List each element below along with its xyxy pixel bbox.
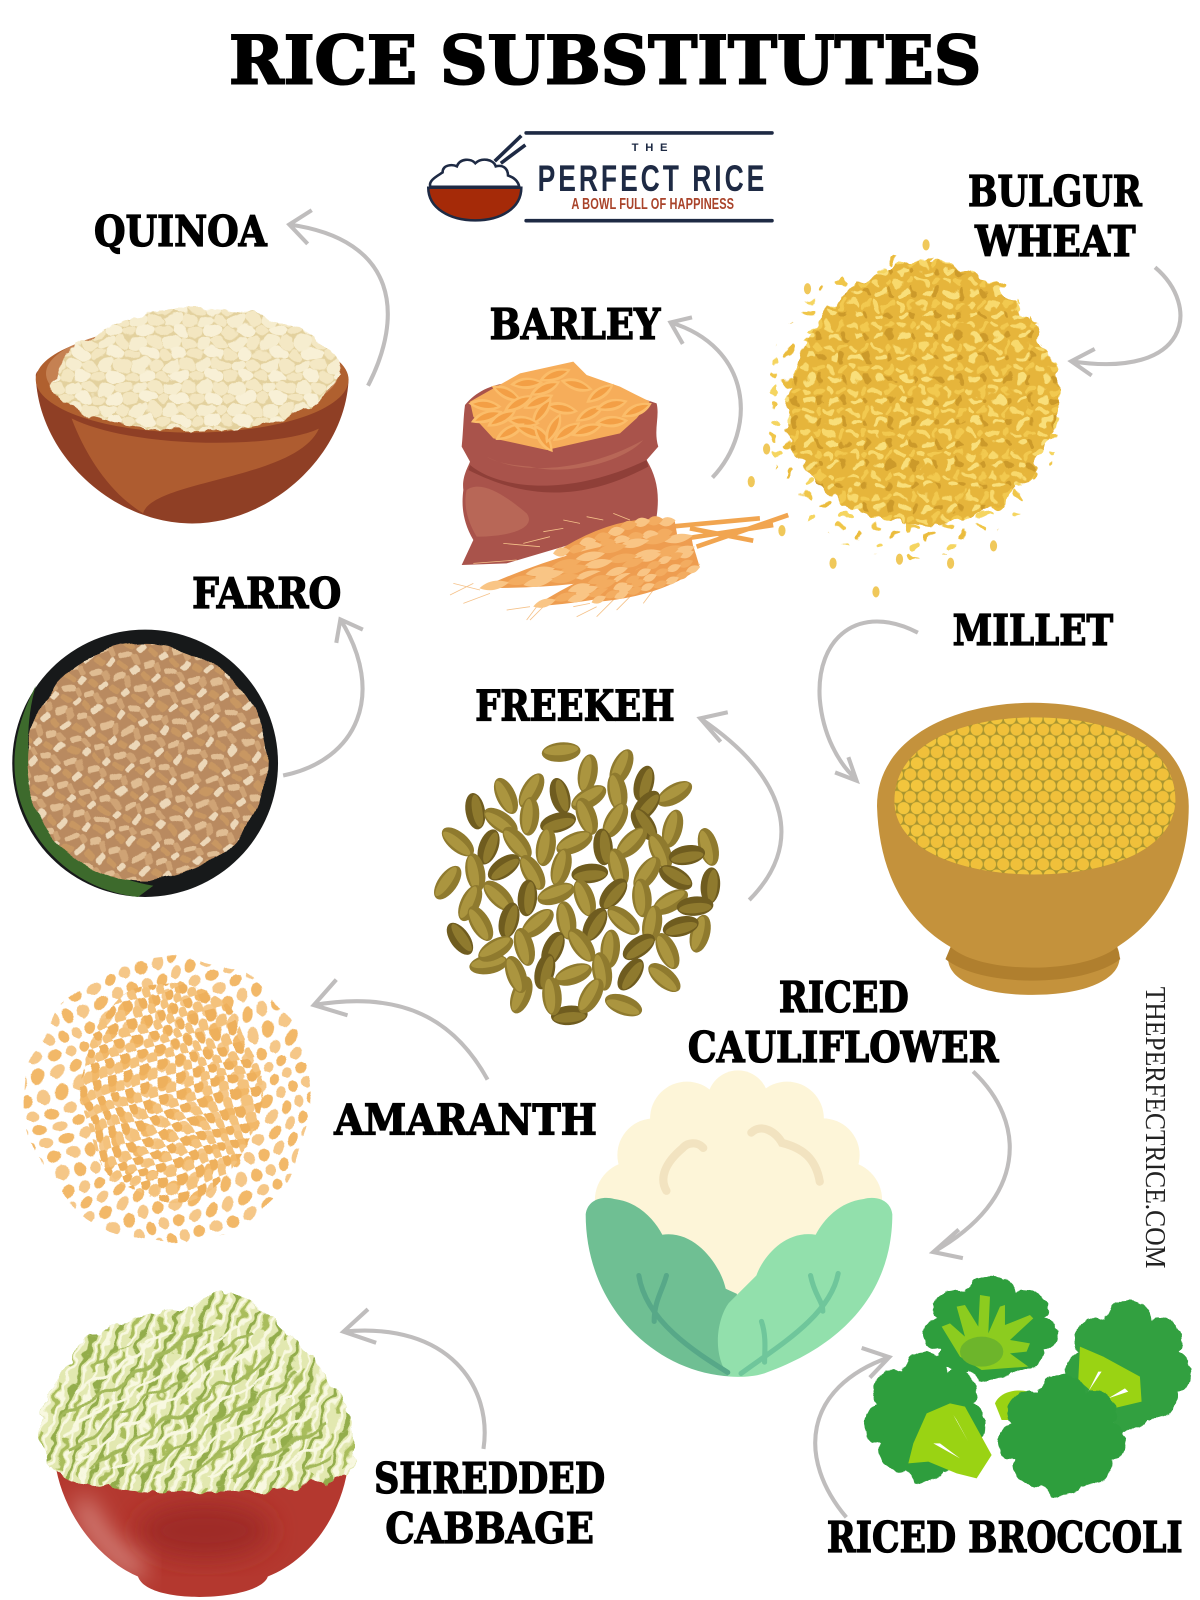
- label: bulgur wheat: BULGUR: [968, 167, 1143, 216]
- illustration: farro plate: [12, 630, 278, 897]
- arrow: freekeh: [700, 712, 781, 900]
- label: barley: BARLEY: [490, 300, 661, 349]
- label: riced cauliflower: [688, 973, 1000, 1072]
- label: shredded cabbage: [374, 1454, 605, 1553]
- illustration: barley sack with wheat: [450, 362, 788, 621]
- floret: right: [1065, 1300, 1191, 1431]
- floret: top: [923, 1276, 1058, 1381]
- label: freekeh: FREEKEH: [475, 681, 675, 730]
- illustration: freekeh grains: [429, 741, 723, 1027]
- arrow: amaranth: [314, 980, 488, 1080]
- arrow: riced broccoli: [815, 1348, 889, 1517]
- floret: bottom: [995, 1375, 1126, 1496]
- floret: left: [864, 1352, 992, 1483]
- illustration: bulgur wheat pile: [748, 239, 1061, 597]
- arrow: riced cauliflower: [933, 1071, 1010, 1258]
- barley grains: [468, 362, 654, 456]
- logo: The Perfect Rice: A BOWL FULL OF HAPPINESS: [571, 195, 734, 213]
- logo: The Perfect Rice: PERFECT RICE: [538, 158, 764, 199]
- label: bulgur wheat: WHEAT: [974, 217, 1136, 266]
- label: bulgur wheat: [968, 167, 1143, 266]
- arrow: shredded cabbage: [343, 1309, 485, 1449]
- icon: rice bowl: [428, 136, 525, 220]
- label: millet: MILLET: [953, 606, 1113, 655]
- arrow: quinoa: [289, 210, 388, 386]
- arrow: millet: [819, 621, 918, 781]
- arrow: barley: [671, 317, 741, 478]
- illustration: amaranth seeds: [28, 957, 314, 1243]
- logo: The Perfect Rice: [428, 131, 774, 222]
- wheat ears: [450, 512, 702, 621]
- label: riced cauliflower: CAULIFLOWER: [688, 1023, 1000, 1072]
- title: RICE SUBSTITUTES: [229, 22, 981, 100]
- label: shredded cabbage: CABBAGE: [385, 1504, 594, 1553]
- illustration: broccoli: [864, 1276, 1191, 1496]
- illustration: millet bowl: [877, 703, 1189, 995]
- label: quinoa: QUINOA: [94, 207, 267, 256]
- label: farro: FARRO: [192, 569, 341, 618]
- label: amaranth: AMARANTH: [333, 1096, 597, 1145]
- label: riced cauliflower: RICED: [779, 973, 909, 1022]
- illustration: cauliflower: [586, 1070, 892, 1377]
- illustration: quinoa bowl: [36, 308, 349, 523]
- logo: The Perfect Rice: THE: [632, 142, 668, 154]
- illustration: shredded cabbage bowl: [38, 1292, 354, 1597]
- side credit text: THEPERFECTRICE.COM: [1139, 987, 1170, 1268]
- arrow: farro: [283, 619, 363, 776]
- arrow: bulgur wheat: [1071, 267, 1180, 376]
- label: shredded cabbage: SHREDDED: [374, 1454, 605, 1503]
